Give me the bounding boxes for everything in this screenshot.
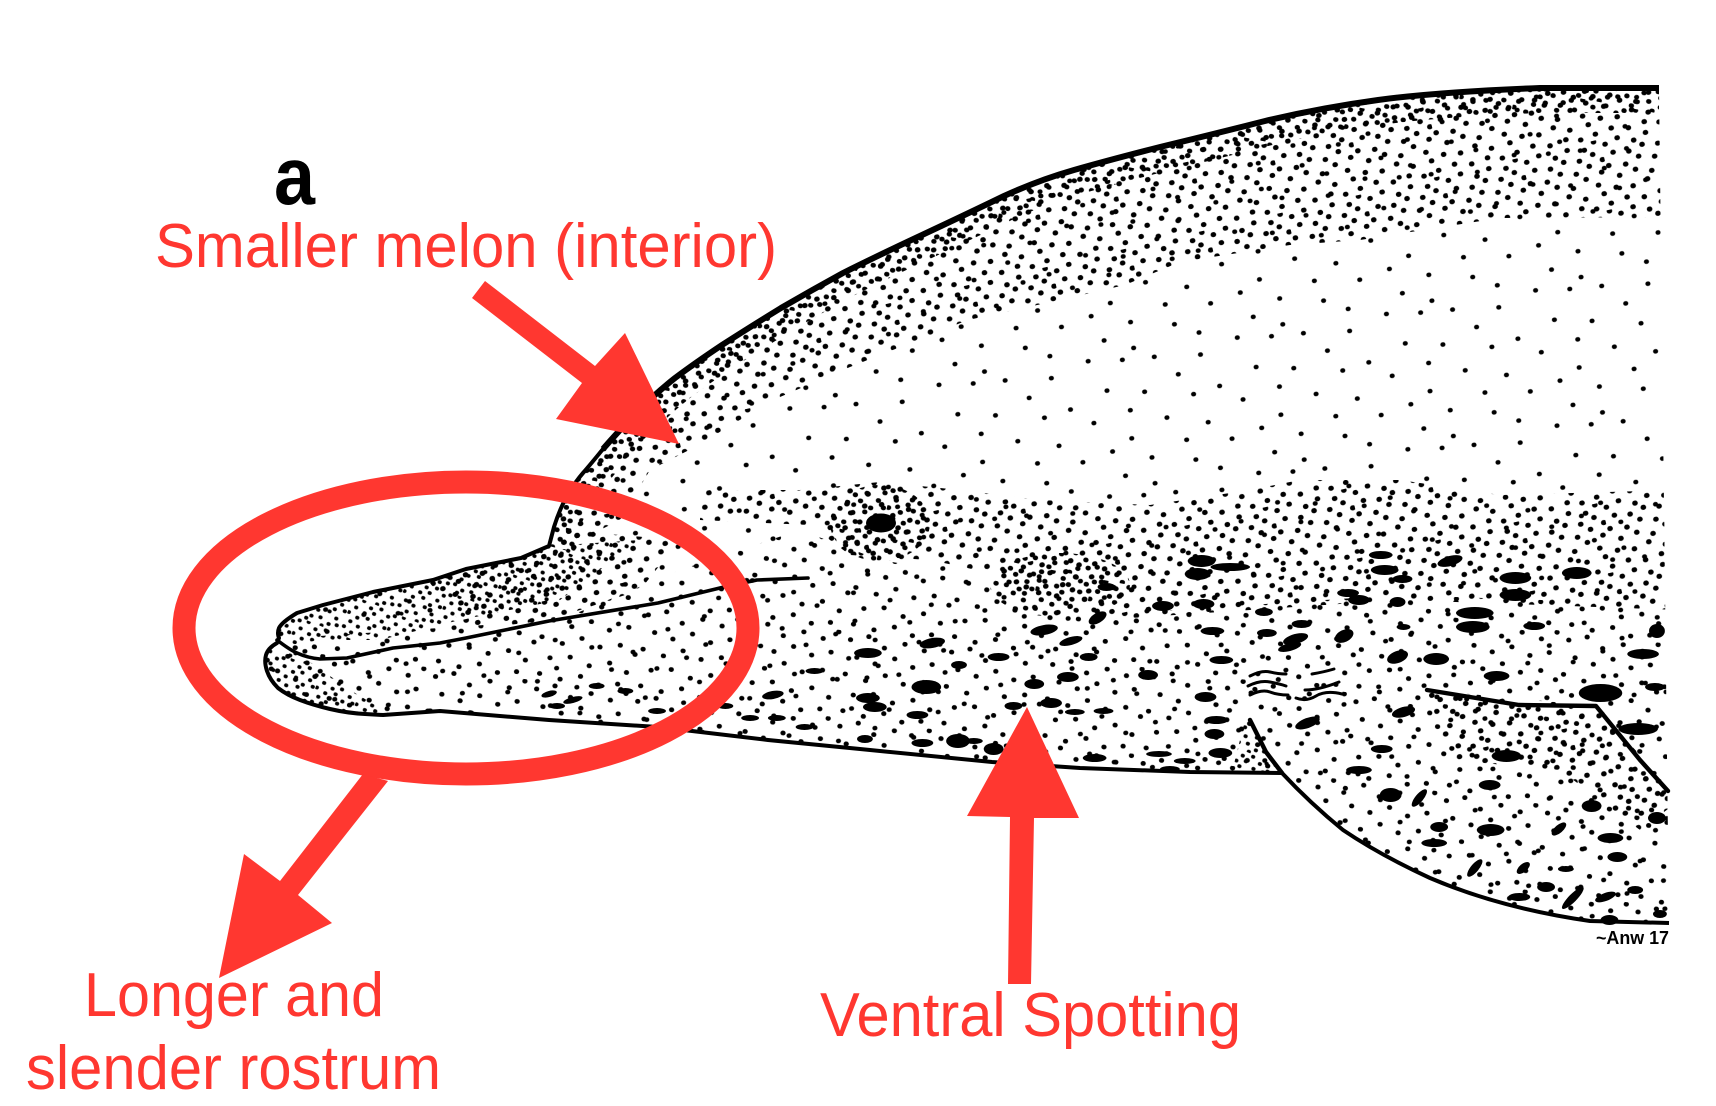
dolphin illustration [260,80,1680,948]
arrow: to melon [472,281,679,444]
ellipse: rostrum highlight [184,482,748,774]
label: smaller melon: Smaller melon (interior) [155,212,777,281]
arrow: to rostrum label [219,774,388,978]
mouth line [277,578,808,659]
ventral spots [541,551,1667,925]
eye [866,514,896,532]
thick dorsal line [603,88,1659,449]
label: ventral spotting: Ventral Spotting [820,981,1241,1050]
stippled skin texture [260,80,1680,940]
flipper lines [1250,690,1668,791]
panel letter a: a [274,131,316,222]
artist signature: ~Anw 17 [1596,928,1669,948]
gill wrinkles [1248,669,1342,700]
label: longer and slender rostrum [26,961,441,1103]
line one: Longer and [84,961,384,1030]
arrow: to ventral spots [967,707,1079,984]
line two: slender rostrum [26,1034,441,1103]
body outline [265,88,1669,923]
